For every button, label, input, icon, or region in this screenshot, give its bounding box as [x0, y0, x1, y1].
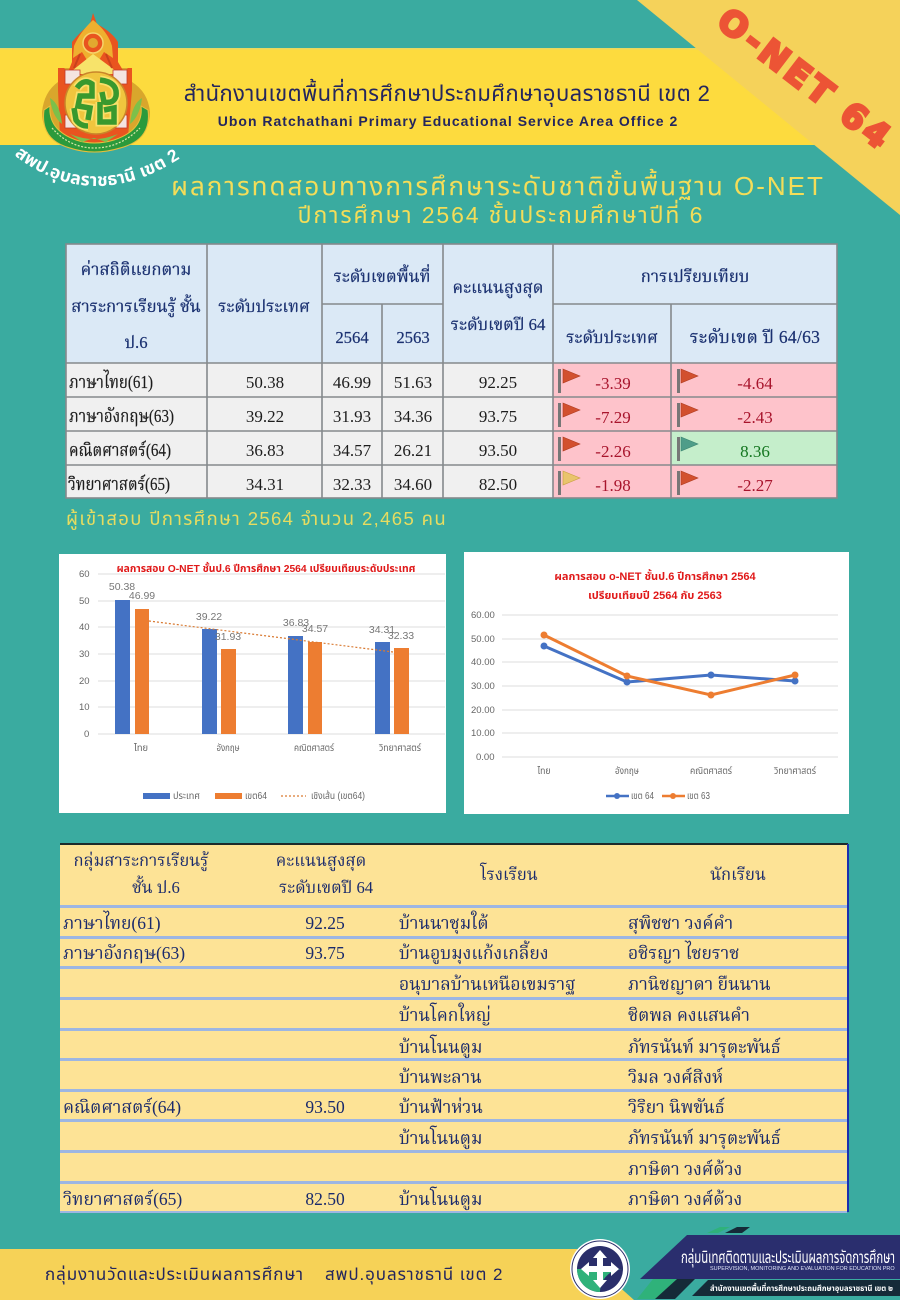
office name: สำนักงานเขตพื้นที่การศึกษาประถมศึกษาอุบลราชธานี เขต 2 [184, 78, 710, 107]
row: ภาษาอังกฤษ: -7.29 [595, 408, 631, 427]
gold arch details [73, 20, 113, 70]
row: วิทยาศาสตร์: -1.98 [595, 476, 631, 495]
monogram [74, 80, 116, 126]
table header cells: สาระการเรียนรู้ ชั้น [71, 294, 201, 317]
logo emblem [42, 13, 150, 152]
scorers header: คะแนนสูงสุด [276, 851, 366, 872]
row: ภาษาอังกฤษ: -2.43 [737, 408, 773, 427]
category labels [537, 765, 816, 777]
data labels: 34.31 [369, 624, 395, 636]
main title: ปีการศึกษา 2564 ชั้นประถมศึกษาปีที่ 6 [298, 199, 704, 228]
grid and y axis: 10 [79, 702, 90, 713]
scorers rows: บ้านอูบมุงแก้งเกลี้ยง [399, 940, 549, 965]
data labels: 39.22 [196, 611, 222, 623]
header band [0, 48, 840, 145]
grid and y axis [79, 569, 445, 740]
row: คณิตศาสตร์: 36.83 [246, 441, 284, 460]
table grid lines [66, 244, 837, 498]
grid and y axis: 60.00 [471, 610, 495, 621]
row: วิทยาศาสตร์: วิทยาศาสตร์(65) [68, 473, 170, 495]
scorers rows: วิริยา นิพขันธ์ [628, 1096, 725, 1117]
scorers header: นักเรียน [710, 865, 766, 884]
grid and y axis: 30 [79, 649, 90, 660]
status flags [558, 369, 698, 495]
bars [115, 600, 409, 734]
chart title: ผลการสอบ o-NET ชั้นป.6 ปีการศึกษา 2564 [554, 568, 756, 583]
scorers rows: ภานิชญาดา ยืนนาน [628, 974, 771, 994]
corner ribbon: O-NET 64 [637, 0, 900, 215]
row: คณิตศาสตร์: คณิตศาสตร์(64) [69, 439, 171, 461]
footer band [0, 1249, 634, 1300]
scorers rows: 93.50 [305, 1097, 345, 1117]
scorers rows: บ้านนาชุมใต้ [399, 911, 489, 935]
scorers rows: อชิรญา ไชยราช [628, 941, 739, 963]
data labels [109, 581, 414, 643]
scorers rows: คณิตศาสตร์(64) [63, 1096, 181, 1117]
legend: เขต 63 [687, 791, 710, 802]
legend [143, 790, 365, 802]
scorers rows: ภาษิตา วงศ์ด้วง [628, 1188, 742, 1209]
row: วิทยาศาสตร์: -2.27 [737, 476, 773, 495]
scorers rows: 93.75 [305, 943, 345, 963]
table header cells: ป.6 [124, 333, 148, 352]
table header cells: คะแนนสูงสุด [453, 278, 543, 299]
grid and y axis: 20 [79, 676, 90, 687]
legend: เขต 64 [631, 791, 654, 802]
series: เขต 64 [540, 642, 798, 686]
grid and y axis: 50.00 [471, 634, 495, 645]
main title: ผลการทดสอบทางการศึกษาระดับชาติขั้นพื้นฐาน O-NET [171, 168, 825, 201]
table header cells: ระดับเขตพื้นที่ [333, 264, 431, 286]
data labels: 36.83 [283, 617, 309, 629]
table header cells: 2563 [396, 328, 430, 347]
outer gold ornament [42, 68, 150, 152]
curved label: สพป.อุบลราชธานี เขต 2: สพป.อุบลราชธานี เขต 2 [16, 148, 180, 186]
scorers rows: ชิตพล คงแสนคำ [628, 1005, 750, 1025]
row: วิทยาศาสตร์: 82.50 [479, 475, 517, 494]
scorers rows: บ้านฟ้าห่วน [399, 1097, 483, 1117]
data labels: 32.33 [388, 630, 414, 642]
scorers rows: อนุบาลบ้านเหนือเขมราฐ [399, 974, 575, 996]
row: คณิตศาสตร์: -2.26 [595, 442, 631, 461]
scorers rows: ภาษิตา วงศ์ด้วง [628, 1158, 742, 1179]
category labels: คณิตศาสตร์ [294, 743, 334, 754]
table header cells: 2564 [335, 328, 369, 347]
row: ภาษาไทย: -4.64 [737, 374, 773, 393]
grid and y axis: 60 [79, 569, 90, 580]
row: วิทยาศาสตร์: 34.31 [246, 475, 284, 494]
table: O-NET scores [66, 244, 837, 498]
footer band: สพป.อุบลราชธานี เขต 2 [325, 1265, 503, 1285]
row: คณิตศาสตร์ [69, 439, 770, 461]
scorers rows: บ้านพะลาน [399, 1067, 482, 1087]
category labels: คณิตศาสตร์ [690, 766, 732, 777]
footer seal icon [570, 1239, 630, 1299]
row: คณิตศาสตร์: 34.57 [333, 441, 372, 460]
scorers header: ชั้น ป.6 [132, 875, 180, 897]
row: ภาษาอังกฤษ: ภาษาอังกฤษ(63) [69, 406, 174, 427]
table header cells: ระดับประเทศ [566, 328, 658, 347]
row: ภาษาอังกฤษ: 31.93 [333, 407, 371, 426]
scorers rows: บ้านโนนตูม [399, 1125, 482, 1149]
office name [184, 78, 710, 129]
lotus corners [65, 70, 127, 128]
row: วิทยาศาสตร์: 34.60 [394, 475, 432, 494]
grid and y axis: 0 [84, 729, 89, 740]
row: ภาษาอังกฤษ [69, 406, 773, 427]
grid and y axis: 40.00 [471, 657, 495, 668]
category labels: วิทยาศาสตร์ [773, 766, 816, 777]
grid and y axis: 50 [79, 596, 90, 607]
table header cells: ระดับเขต ปี 64/63 [690, 327, 820, 347]
chart title: ผลการสอบ O-NET ชั้นป.6 ปีการศึกษา 2564 เปรียบเทียบระดับประเทศ [117, 561, 416, 575]
footer banner: supervision group: สำนักงานเขตพื้นที่การศึกษาประถมศึกษาอุบลราชธานี เขต ๒ [710, 1282, 893, 1293]
chart title: เปรียบเทียบปี 2564 กับ 2563 [588, 590, 722, 602]
legend: เชิงเส้น (เขต64) [311, 790, 365, 802]
table: top scorers [60, 843, 849, 1213]
scorers rows: 82.50 [305, 1189, 345, 1209]
scorers rows: บ้านโคกใหญ่ [399, 1002, 491, 1025]
footer band: กลุ่มงานวัดและประเมินผลการศึกษา [45, 1265, 304, 1285]
scorers rows [63, 911, 781, 1210]
legend [606, 791, 710, 802]
bar chart: national vs district [59, 554, 446, 813]
category labels: วิทยาศาสตร์ [378, 743, 421, 754]
main title [171, 168, 825, 228]
legend: ประเทศ [173, 791, 200, 802]
row: ภาษาอังกฤษ: 34.36 [394, 407, 432, 426]
side ornaments [50, 98, 142, 124]
category labels: ไทย [537, 765, 551, 777]
bottom leaf motif [70, 134, 118, 142]
table header cells: ระดับเขตปี 64 [451, 315, 546, 334]
category labels: อังกฤษ [216, 742, 240, 754]
grid and y axis: 10.00 [471, 728, 495, 739]
scorers rows: ภาษาไทย(61) [63, 911, 161, 933]
orange arch [58, 13, 132, 152]
scorers rows: ภาษาอังกฤษ(63) [63, 943, 185, 963]
category labels [133, 742, 421, 754]
grid and y axis [471, 610, 838, 763]
footer banner: supervision group: SUPERVISION, MONITORING AND EVALUATION FOR EDUCATION PRO [710, 1266, 895, 1272]
row: คณิตศาสตร์: 8.36 [740, 442, 770, 461]
scorers header: ระดับเขตปี 64 [279, 878, 374, 897]
row: ภาษาอังกฤษ: 39.22 [246, 407, 284, 426]
scorers rows: วิมล วงศ์สิงห์ [628, 1066, 723, 1087]
row: วิทยาศาสตร์: 32.33 [333, 475, 371, 494]
data labels: 46.99 [129, 590, 155, 602]
category labels: ไทย [133, 742, 148, 754]
scorers rows: วิทยาศาสตร์(65) [63, 1188, 182, 1209]
row: คณิตศาสตร์: 26.21 [394, 441, 432, 460]
central circle [65, 72, 127, 134]
scorers rows: บ้านโนนตูม [399, 1186, 482, 1210]
grid and y axis: 40 [79, 622, 90, 633]
row: ภาษาอังกฤษ: 93.75 [479, 407, 517, 426]
corner ribbon: O-NET 64: O-NET 64 [710, 0, 900, 159]
table header cells [66, 244, 837, 363]
row: ภาษาไทย: 92.25 [479, 373, 517, 392]
row: ภาษาไทย: ภาษาไทย(61) [69, 370, 153, 393]
data labels: 31.93 [215, 631, 241, 643]
table header cells: การเปรียบเทียบ [641, 267, 749, 286]
scorers rows: 92.25 [305, 913, 345, 933]
chart title [554, 568, 756, 602]
footer banner: supervision group [637, 1227, 900, 1299]
legend: เขต64 [245, 791, 267, 802]
scorers rows: บ้านโนนตูม [399, 1034, 482, 1058]
scorers header [73, 851, 766, 897]
row: คณิตศาสตร์: 93.50 [479, 441, 517, 460]
green text ring [44, 106, 148, 152]
grid and y axis: 20.00 [471, 705, 495, 716]
row: วิทยาศาสตร์ [68, 473, 773, 495]
row: ภาษาไทย [69, 370, 773, 393]
scorers rows: ภัทรนันท์ มารุตะพันธ์ [628, 1127, 781, 1150]
scorers rows: สุพิชชา วงค์คำ [628, 912, 733, 935]
data labels: 34.57 [302, 623, 328, 635]
grid and y axis: 0.00 [476, 752, 494, 763]
trend line [149, 621, 393, 652]
row: ภาษาไทย: 46.99 [333, 373, 371, 392]
row: ภาษาไทย: -3.39 [595, 374, 631, 393]
line chart: 2564 vs 2563 [464, 552, 849, 814]
scorers header: กลุ่มสาระการเรียนรู้ [73, 851, 209, 872]
grid and y axis: 30.00 [471, 681, 495, 692]
examinee count: ผู้เข้าสอบ ปีการศึกษา 2564 จำนวน 2,465 คน [66, 508, 447, 531]
row: ภาษาไทย: 50.38 [246, 373, 284, 392]
data labels: 50.38 [109, 581, 135, 593]
table header cells: ค่าสถิติแยกตาม [81, 260, 191, 279]
category labels: อังกฤษ [615, 765, 639, 777]
table body: row backgrounds [66, 363, 837, 498]
row: ภาษาไทย: 51.63 [394, 373, 432, 392]
table header cells: ระดับประเทศ [218, 297, 310, 316]
series: เขต 63 [540, 632, 798, 698]
scorers rows: ภัทรนันท์ มารุตะพันธ์ [628, 1036, 781, 1059]
scorers header: โรงเรียน [479, 864, 538, 884]
office name: Ubon Ratchathani Primary Educational Service Area Office 2 [218, 113, 678, 129]
